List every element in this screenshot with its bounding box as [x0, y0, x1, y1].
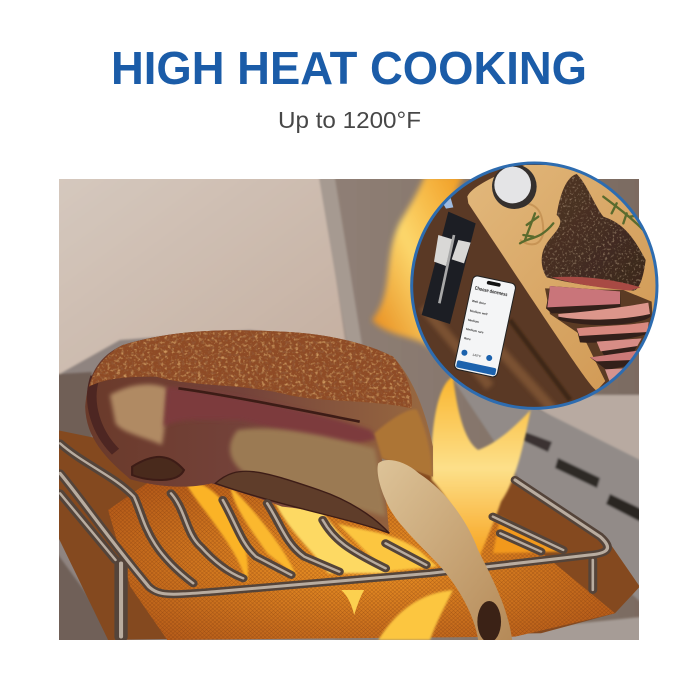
- thyme sprigs: [520, 197, 643, 243]
- rib highlights: [60, 443, 607, 637]
- orange burner mesh: [108, 467, 615, 640]
- board groove: [520, 203, 543, 244]
- seared crust: [89, 330, 412, 408]
- smartphone with doneness menu: Rare: [464, 336, 471, 341]
- meat chop: [85, 330, 433, 533]
- meat body: [85, 330, 433, 533]
- meat thermometer block: [422, 212, 476, 324]
- main photo: steak on a grill over flames: [59, 179, 639, 640]
- pink cut edge: [552, 277, 641, 291]
- whole steak: [542, 174, 646, 291]
- subtitle: Up to 1200°F: [278, 107, 421, 133]
- pale mid section: [230, 428, 386, 517]
- cutting board: [467, 165, 663, 391]
- flame behind inset: [372, 175, 464, 350]
- main upright flames: [186, 377, 563, 583]
- title: HIGH HEAT COOKING: [111, 42, 587, 94]
- red lean band: [164, 387, 376, 443]
- smartphone with doneness menu: Well done: [472, 299, 487, 306]
- dark seams: [92, 377, 389, 533]
- inset circle: thermometer, phone app and sliced steak: [412, 163, 663, 410]
- smartphone with doneness menu: 140°F: [472, 353, 482, 359]
- dim inner wall of burner box: [56, 430, 640, 640]
- bone: [378, 460, 512, 640]
- burner box and mesh, in zoomed coordinates: [56, 377, 640, 640]
- smartphone with doneness menu: Medium rare: [466, 327, 484, 335]
- smartphone with doneness menu: Medium well: [470, 309, 488, 316]
- rib shadows: [60, 443, 607, 637]
- wood table: [413, 164, 606, 407]
- stainless steel side tray: [59, 380, 639, 640]
- background wall and smoke: [59, 179, 639, 640]
- pale fat edge: [110, 384, 167, 445]
- salt bowl: [492, 164, 537, 209]
- grill ribs and front rail: [60, 443, 607, 637]
- rib bone and front flames: [341, 460, 512, 642]
- smartphone with doneness menu: Medium: [468, 318, 480, 324]
- circle border: [412, 163, 657, 408]
- smartphone with doneness menu: Choose doneness: [474, 285, 508, 298]
- steak slices: [545, 286, 653, 384]
- right end of chop: [374, 409, 432, 477]
- smartphone with doneness menu: [453, 274, 517, 378]
- blue corner fragment: [443, 198, 453, 209]
